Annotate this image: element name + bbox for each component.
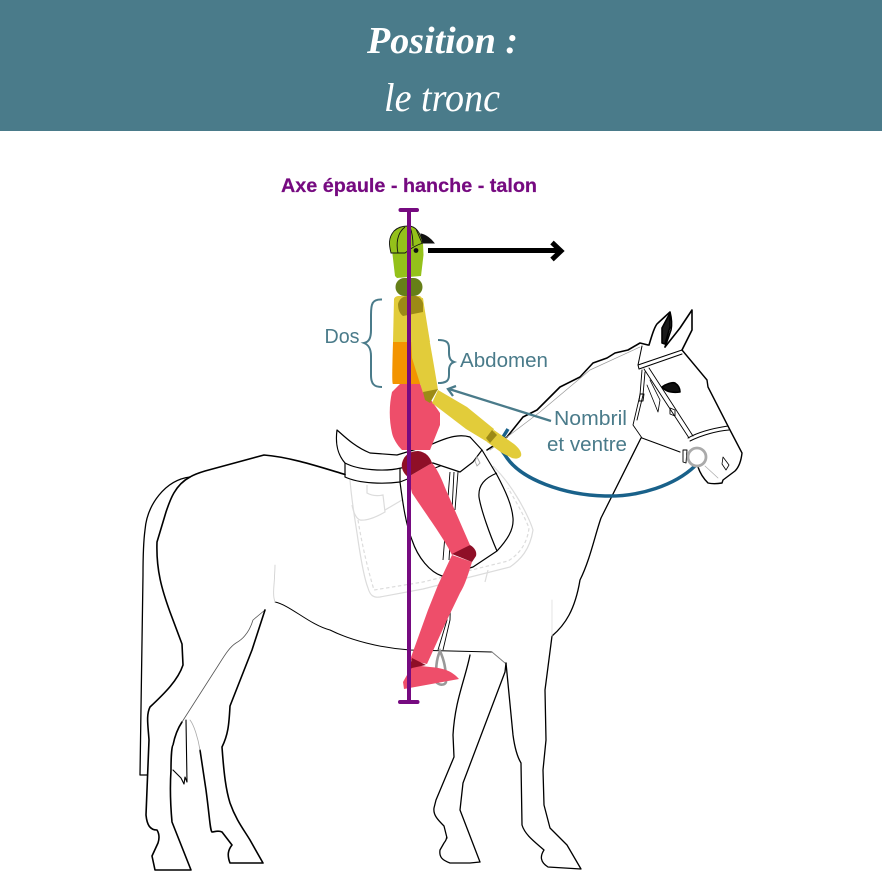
- label: nombril et ventre: [547, 408, 627, 456]
- buckle pieces: [639, 394, 675, 416]
- label: abdomen: Abdomen: [460, 350, 548, 372]
- nostril: [722, 457, 729, 470]
- eye: [414, 248, 418, 253]
- ankle joint: [409, 658, 426, 670]
- elbow joint: [423, 389, 438, 403]
- gaze arrow: [428, 242, 561, 260]
- rein: [502, 429, 695, 496]
- label: nombril et ventre: Nombril: [554, 408, 627, 430]
- knee roll flap: [400, 450, 513, 576]
- tail tip: [173, 720, 187, 784]
- belly: [275, 602, 492, 652]
- ear left: [649, 312, 672, 347]
- rider: [389, 226, 521, 689]
- girth loop: [475, 457, 480, 466]
- pelvis: [390, 384, 440, 450]
- skirt: [345, 463, 400, 483]
- knee joint: [452, 545, 476, 562]
- browband: [638, 350, 682, 369]
- thin flank line: [182, 610, 265, 722]
- header banner: [0, 0, 882, 131]
- hand: [487, 430, 521, 459]
- saddle: [336, 430, 513, 650]
- ear right: [665, 310, 692, 350]
- chest and neck underside: [552, 438, 641, 636]
- near hind leg: [146, 477, 191, 870]
- upper arm: [409, 298, 438, 393]
- hip joint: [402, 451, 432, 477]
- jaw: [642, 438, 680, 452]
- bit ring: [688, 448, 706, 466]
- neck: [396, 278, 422, 296]
- front leg right: [506, 636, 581, 869]
- cheek straps: [644, 368, 693, 438]
- riding hat: [389, 226, 434, 253]
- forelock shoulder: [551, 600, 553, 636]
- shin: [410, 555, 472, 664]
- saddle pad: [350, 466, 533, 597]
- brace: dos: [364, 299, 382, 387]
- abdomen orange: [392, 342, 421, 384]
- horse outline: [140, 310, 742, 870]
- mouth: [705, 466, 718, 478]
- label: dos: Dos: [324, 326, 360, 348]
- brace: abdomen: [438, 340, 454, 383]
- front leg left: [434, 655, 506, 863]
- tail: [140, 477, 190, 775]
- noseband: [688, 426, 729, 441]
- pointer arrow to navel: [448, 386, 551, 421]
- axis heading: Axe épaule - hanche - talon: [281, 176, 537, 197]
- visor: [421, 234, 434, 243]
- thigh: [408, 463, 470, 555]
- eye: [662, 383, 680, 392]
- subtitle: le tronc: [384, 75, 500, 120]
- stirrup leathers: [443, 472, 458, 560]
- stirrup iron: [436, 651, 446, 685]
- seat: [336, 430, 482, 472]
- label: nombril et ventre: et ventre: [547, 434, 627, 456]
- rider head: [392, 243, 424, 278]
- shoulder joint: [398, 296, 423, 316]
- crest: [487, 343, 648, 450]
- back and croup: [190, 455, 345, 477]
- vertical axis: [400, 210, 418, 702]
- far hind leg: [200, 610, 265, 863]
- wrist: [486, 430, 497, 443]
- ear inner: [662, 313, 670, 344]
- foot: [403, 665, 459, 689]
- title: Position :: [366, 20, 518, 62]
- head: [682, 350, 742, 484]
- forearm: [432, 390, 494, 443]
- flap inner: [479, 473, 497, 551]
- back upper: [393, 296, 430, 342]
